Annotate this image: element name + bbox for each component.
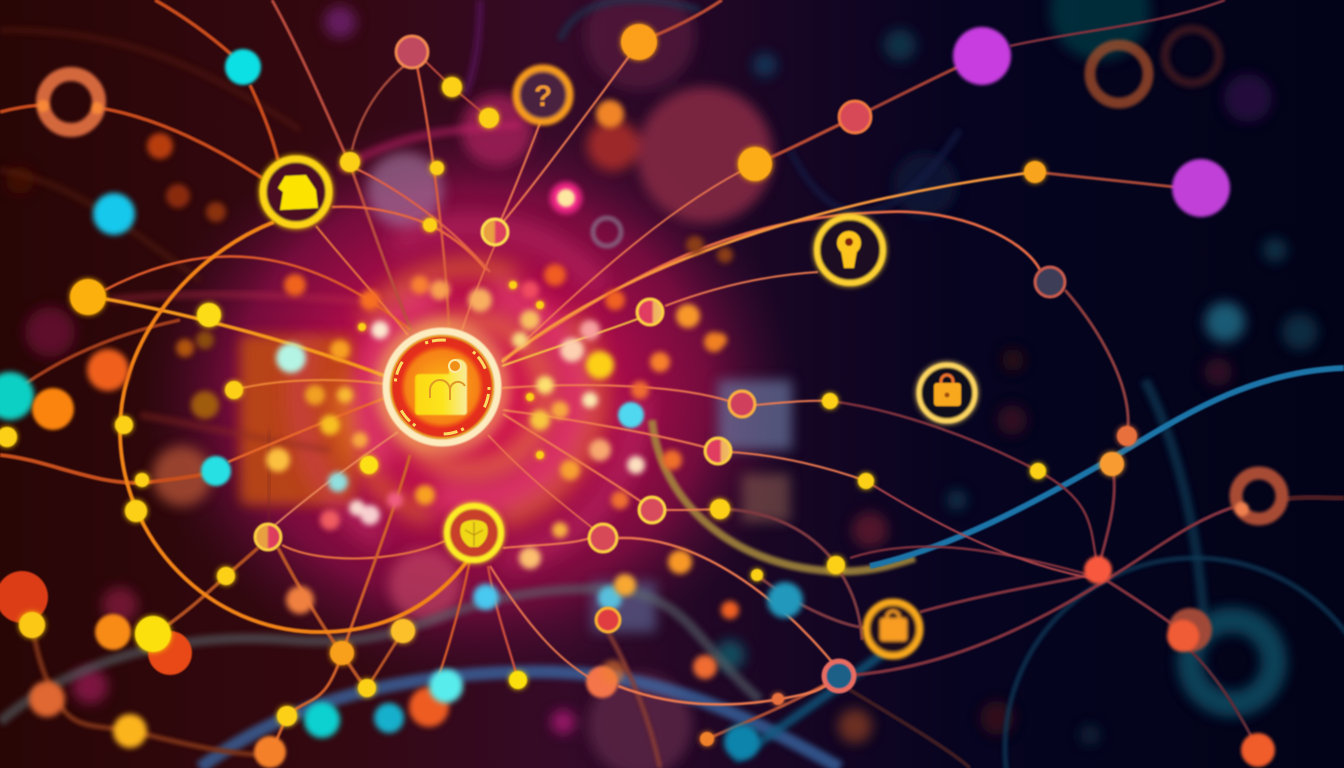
ringed junction nodes [255, 36, 1065, 691]
icon badge: question mark [516, 68, 570, 122]
icon badge: question mark: ? [534, 80, 552, 113]
icon badge: brain [447, 506, 501, 560]
central cluster of small bokeh dots [176, 236, 739, 619]
warm right-side connection lines [424, 55, 866, 704]
blue wave line [870, 368, 1344, 566]
central crimson glow [140, 110, 800, 680]
icon badge: top-left storage [263, 159, 329, 225]
central hub: padlock coin [374, 319, 510, 455]
concentric swirl around the hub [300, 225, 640, 565]
muted right-side connection lines [608, 0, 1344, 768]
bright hub lines to the upper right [502, 172, 1040, 366]
small sharp yellow nodes [0, 24, 1137, 746]
icon badge: padlock right [919, 365, 975, 421]
icon badge: keyhole bulb [817, 217, 883, 283]
icon badge: padlock lower [866, 602, 920, 656]
yellow sweeping arc [652, 420, 915, 571]
bright line to the hub [100, 298, 385, 376]
left-side connection lines [0, 0, 518, 755]
large orange loop [120, 222, 468, 632]
